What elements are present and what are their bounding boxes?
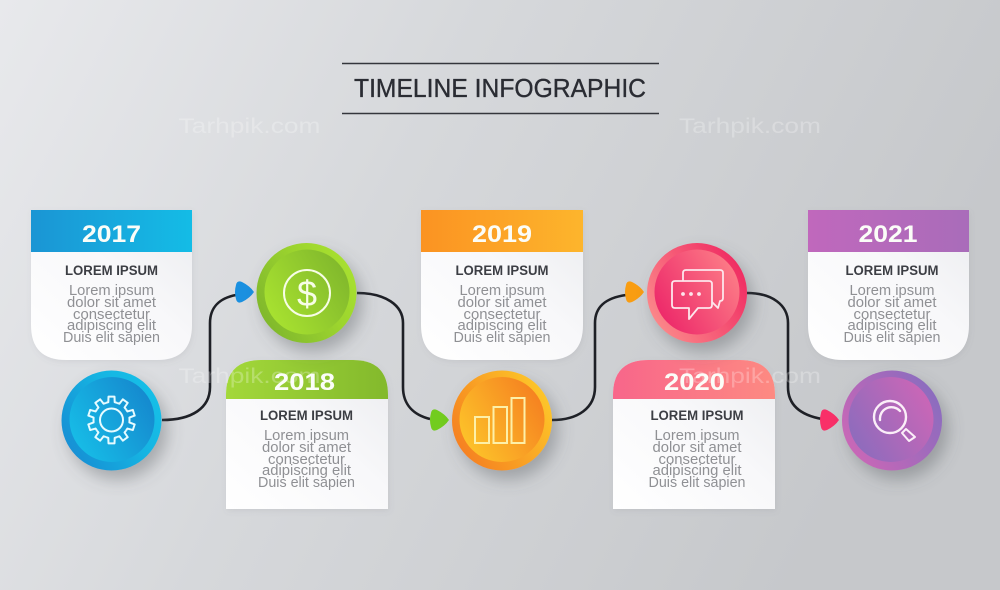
panel: 2017: adipiscing elit bbox=[67, 318, 156, 334]
panel: 2021: Lorem ipsum bbox=[850, 283, 934, 299]
arrow: orange bbox=[625, 281, 644, 303]
panel: 2020: Duis elit sapien bbox=[648, 475, 746, 491]
connector: gear to dollar bbox=[162, 295, 236, 420]
arrow: pink bbox=[820, 409, 839, 431]
arrow: blue bbox=[235, 281, 254, 303]
panel: 2021: adipiscing elit bbox=[848, 318, 936, 334]
panel: 2019 bbox=[421, 210, 583, 360]
panel: 2020: adipiscing elit bbox=[652, 463, 742, 479]
panel: 2020 bbox=[613, 360, 775, 509]
panel: 2019: consectetur bbox=[464, 307, 541, 323]
panel: 2019: dolor sit amet bbox=[458, 295, 546, 311]
panel: 2020: consectetur bbox=[658, 452, 736, 468]
header: 2019 bbox=[421, 210, 583, 252]
connector: dollar to chart bbox=[357, 293, 430, 419]
watermarks over cards bbox=[178, 365, 821, 388]
panel: 2017: dolor sit amet bbox=[67, 295, 156, 311]
title: TIMELINE INFOGRAPHIC bbox=[354, 73, 646, 103]
node: dollar bbox=[256, 243, 356, 343]
panel: 2018: adipiscing elit bbox=[262, 463, 351, 479]
panel: 2018 bbox=[226, 360, 388, 509]
panel: 2019: LOREM IPSUM bbox=[456, 263, 548, 278]
icon: bar chart bbox=[475, 398, 524, 443]
panel: 2020: Lorem ipsum bbox=[654, 428, 740, 444]
node: chart bbox=[452, 370, 552, 470]
panel: 2019: Lorem ipsum bbox=[460, 283, 544, 299]
icon: magnifier bbox=[874, 401, 915, 441]
node: chat bbox=[647, 243, 747, 343]
panel: 2017: Duis elit sapien bbox=[63, 330, 160, 346]
panel: 2018: 2018 bbox=[274, 369, 335, 396]
panel: 2021: Duis elit sapien bbox=[844, 330, 940, 346]
panel: 2020: LOREM IPSUM bbox=[650, 408, 744, 423]
panel: 2020: dolor sit amet bbox=[652, 440, 742, 456]
watermarks bbox=[178, 115, 821, 138]
header: 2017 bbox=[31, 210, 192, 252]
panel: 2017: LOREM IPSUM bbox=[65, 263, 158, 278]
panel: 2018: consectetur bbox=[268, 452, 345, 468]
panel: 2021: dolor sit amet bbox=[848, 295, 936, 311]
header: 2020 bbox=[613, 360, 775, 399]
panel: 2018: Duis elit sapien bbox=[258, 475, 355, 491]
panel: 2018: LOREM IPSUM bbox=[260, 408, 353, 423]
icon: gear bbox=[88, 397, 135, 443]
connector: chart to chat bbox=[552, 295, 626, 420]
icon: chat bubbles bbox=[672, 270, 723, 319]
icon: dollar coin: $ bbox=[297, 273, 317, 314]
panel: 2017 bbox=[31, 210, 192, 360]
panel: 2018: Lorem ipsum bbox=[264, 428, 349, 444]
panel: 2017: 2017 bbox=[82, 221, 141, 248]
panel: 2020: 2020 bbox=[664, 369, 725, 396]
node: search bbox=[842, 370, 942, 470]
panel: 2018: dolor sit amet bbox=[262, 440, 351, 456]
watermarks over cards: Tarhpik.com bbox=[178, 365, 320, 388]
connector: chat to search bbox=[747, 293, 822, 419]
watermarks over cards: Tarhpik.com bbox=[679, 365, 821, 388]
panel: 2021 bbox=[808, 210, 969, 360]
panel: 2017: Lorem ipsum bbox=[69, 283, 154, 299]
panel: 2017: consectetur bbox=[73, 307, 150, 323]
panel: 2019: 2019 bbox=[472, 221, 532, 248]
panel: 2021: consectetur bbox=[854, 307, 931, 323]
panel: 2021: LOREM IPSUM bbox=[846, 263, 938, 278]
watermarks: Tarhpik.com bbox=[679, 115, 821, 138]
arrow: green bbox=[430, 409, 449, 431]
header: 2018 bbox=[226, 360, 388, 399]
watermarks: Tarhpik.com bbox=[178, 115, 320, 138]
panel: 2021: 2021 bbox=[858, 221, 918, 248]
panel: 2019: adipiscing elit bbox=[458, 318, 546, 334]
header: 2021 bbox=[808, 210, 969, 252]
node: gear bbox=[62, 370, 162, 470]
panel: 2019: Duis elit sapien bbox=[454, 330, 550, 346]
